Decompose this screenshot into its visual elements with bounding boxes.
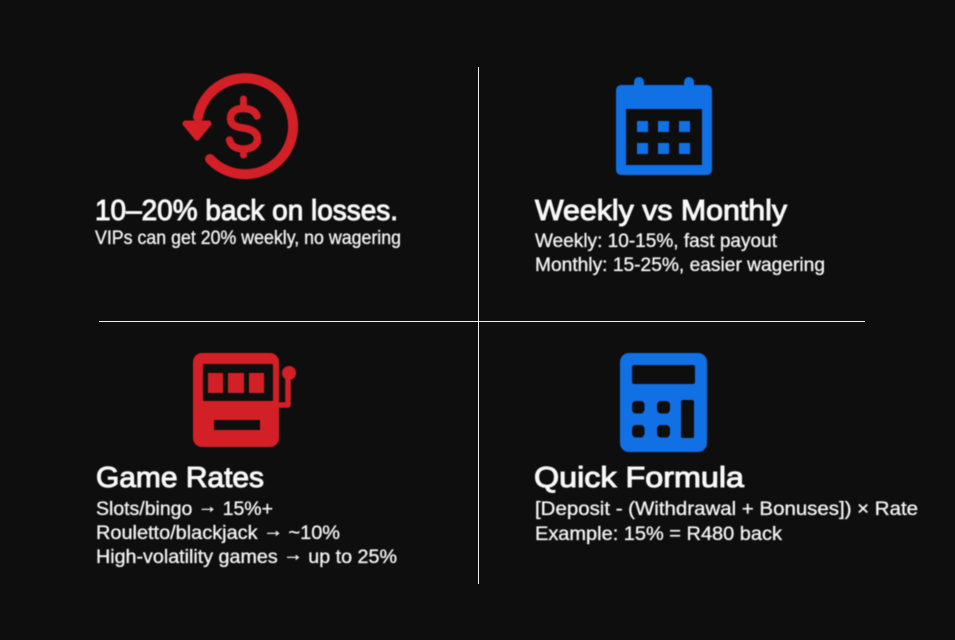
text: roulette and blackjack rate: →	[263, 520, 283, 542]
text: slots and bingo rate: Slots/bingo	[96, 499, 190, 520]
text: formula: [Deposit - (Withdrawal + Bonuses]) × Rate	[535, 499, 918, 520]
icon: slot machine	[193, 353, 296, 447]
heading: 10-20% back on losses: 10–20% back on losses.	[95, 195, 398, 227]
text: weekly rate: Weekly: 10-15%, fast payout	[535, 231, 778, 252]
panel: cashback on losses	[95, 78, 401, 249]
text: roulette and blackjack rate: Rouletto/blackjack	[96, 523, 250, 544]
heading: game rates: Game Rates	[96, 462, 264, 494]
heading: quick formula: Quick Formula	[534, 462, 744, 494]
text: roulette and blackjack rate: ~10%	[289, 523, 340, 544]
text: VIP note: VIPs can get 20% weekly, no wagering	[95, 228, 401, 249]
text: high-volatility rate: High-volatility games	[96, 547, 271, 568]
panel: game rates	[96, 353, 397, 568]
icon: calendar	[616, 77, 712, 175]
text: slots and bingo rate: 15%+	[223, 499, 273, 520]
icon: calculator	[620, 353, 707, 452]
icon: dollar with return arrow	[186, 78, 293, 174]
text: high-volatility rate: →	[283, 544, 303, 566]
text: slots and bingo rate: →	[198, 496, 217, 518]
text: high-volatility rate: up to 25%	[308, 547, 397, 568]
panel: weekly vs monthly	[535, 77, 825, 276]
panel: quick formula	[534, 353, 918, 545]
heading: weekly vs monthly: Weekly vs Monthly	[535, 195, 788, 227]
text: example: Example: 15% = R480 back	[535, 524, 783, 545]
text: monthly rate: Monthly: 15-25%, easier wagering	[535, 255, 825, 276]
